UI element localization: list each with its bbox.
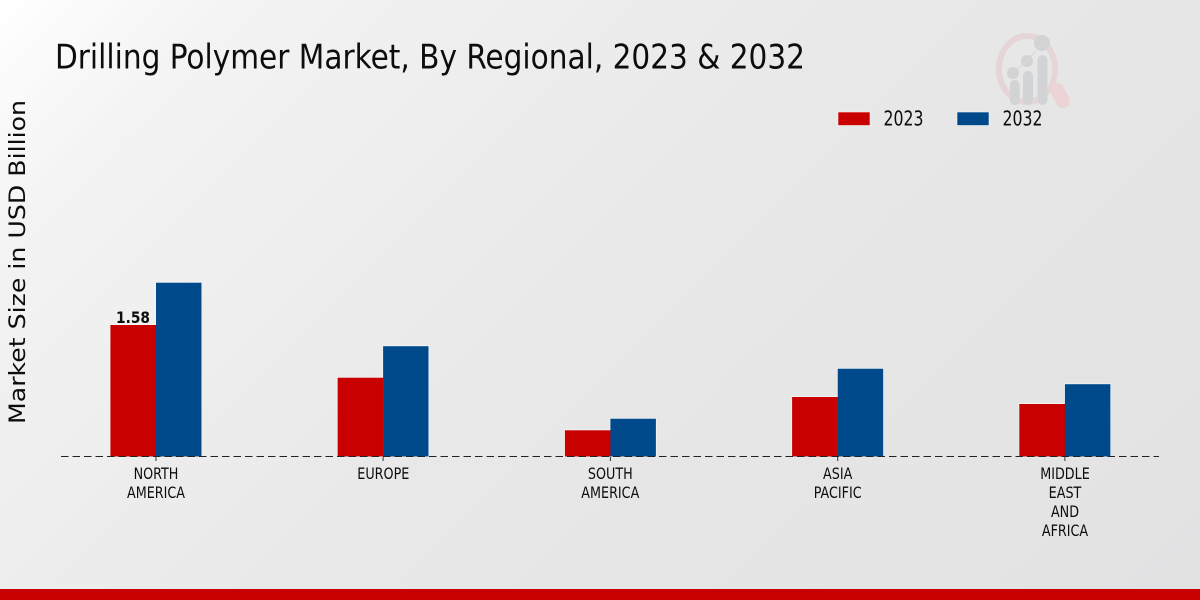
watermark logo — [999, 35, 1063, 105]
legend label 2023: 2023 — [884, 106, 924, 130]
label: south america: AMERICA — [581, 483, 640, 502]
label: north america: AMERICA — [127, 483, 186, 502]
label: asia pacific: ASIA — [823, 464, 852, 483]
legend swatch 2023 — [838, 112, 870, 126]
bar chart — [61, 283, 1159, 540]
legend swatch 2032 — [957, 112, 989, 126]
bars: middle east and africa — [1019, 384, 1110, 456]
label: asia pacific: PACIFIC — [814, 483, 862, 502]
title: Drilling Polymer Market, By Regional, 2023 & 2032 — [55, 38, 805, 78]
data label: 1.58 — [116, 308, 150, 327]
label: middle east and africa: MIDDLE — [1040, 464, 1090, 483]
label: south america: SOUTH — [588, 464, 633, 483]
label: europe: EUROPE — [357, 464, 409, 483]
legend — [838, 106, 1042, 130]
bars: europe — [338, 346, 428, 456]
bottom red band — [0, 589, 1200, 600]
category labels — [127, 464, 1090, 540]
label: middle east and africa: AND — [1051, 502, 1079, 521]
label: north america: NORTH — [134, 464, 178, 483]
label: middle east and africa: AFRICA — [1042, 521, 1089, 540]
bars: south america — [565, 419, 656, 456]
bars: asia pacific — [792, 369, 883, 456]
bars: north america — [110, 283, 202, 456]
y axis title: Market Size in USD Billion — [5, 100, 31, 424]
baseline — [61, 456, 1159, 458]
label: middle east and africa: EAST — [1049, 483, 1082, 502]
legend label 2032: 2032 — [1002, 106, 1042, 130]
tick marks — [156, 457, 1065, 461]
